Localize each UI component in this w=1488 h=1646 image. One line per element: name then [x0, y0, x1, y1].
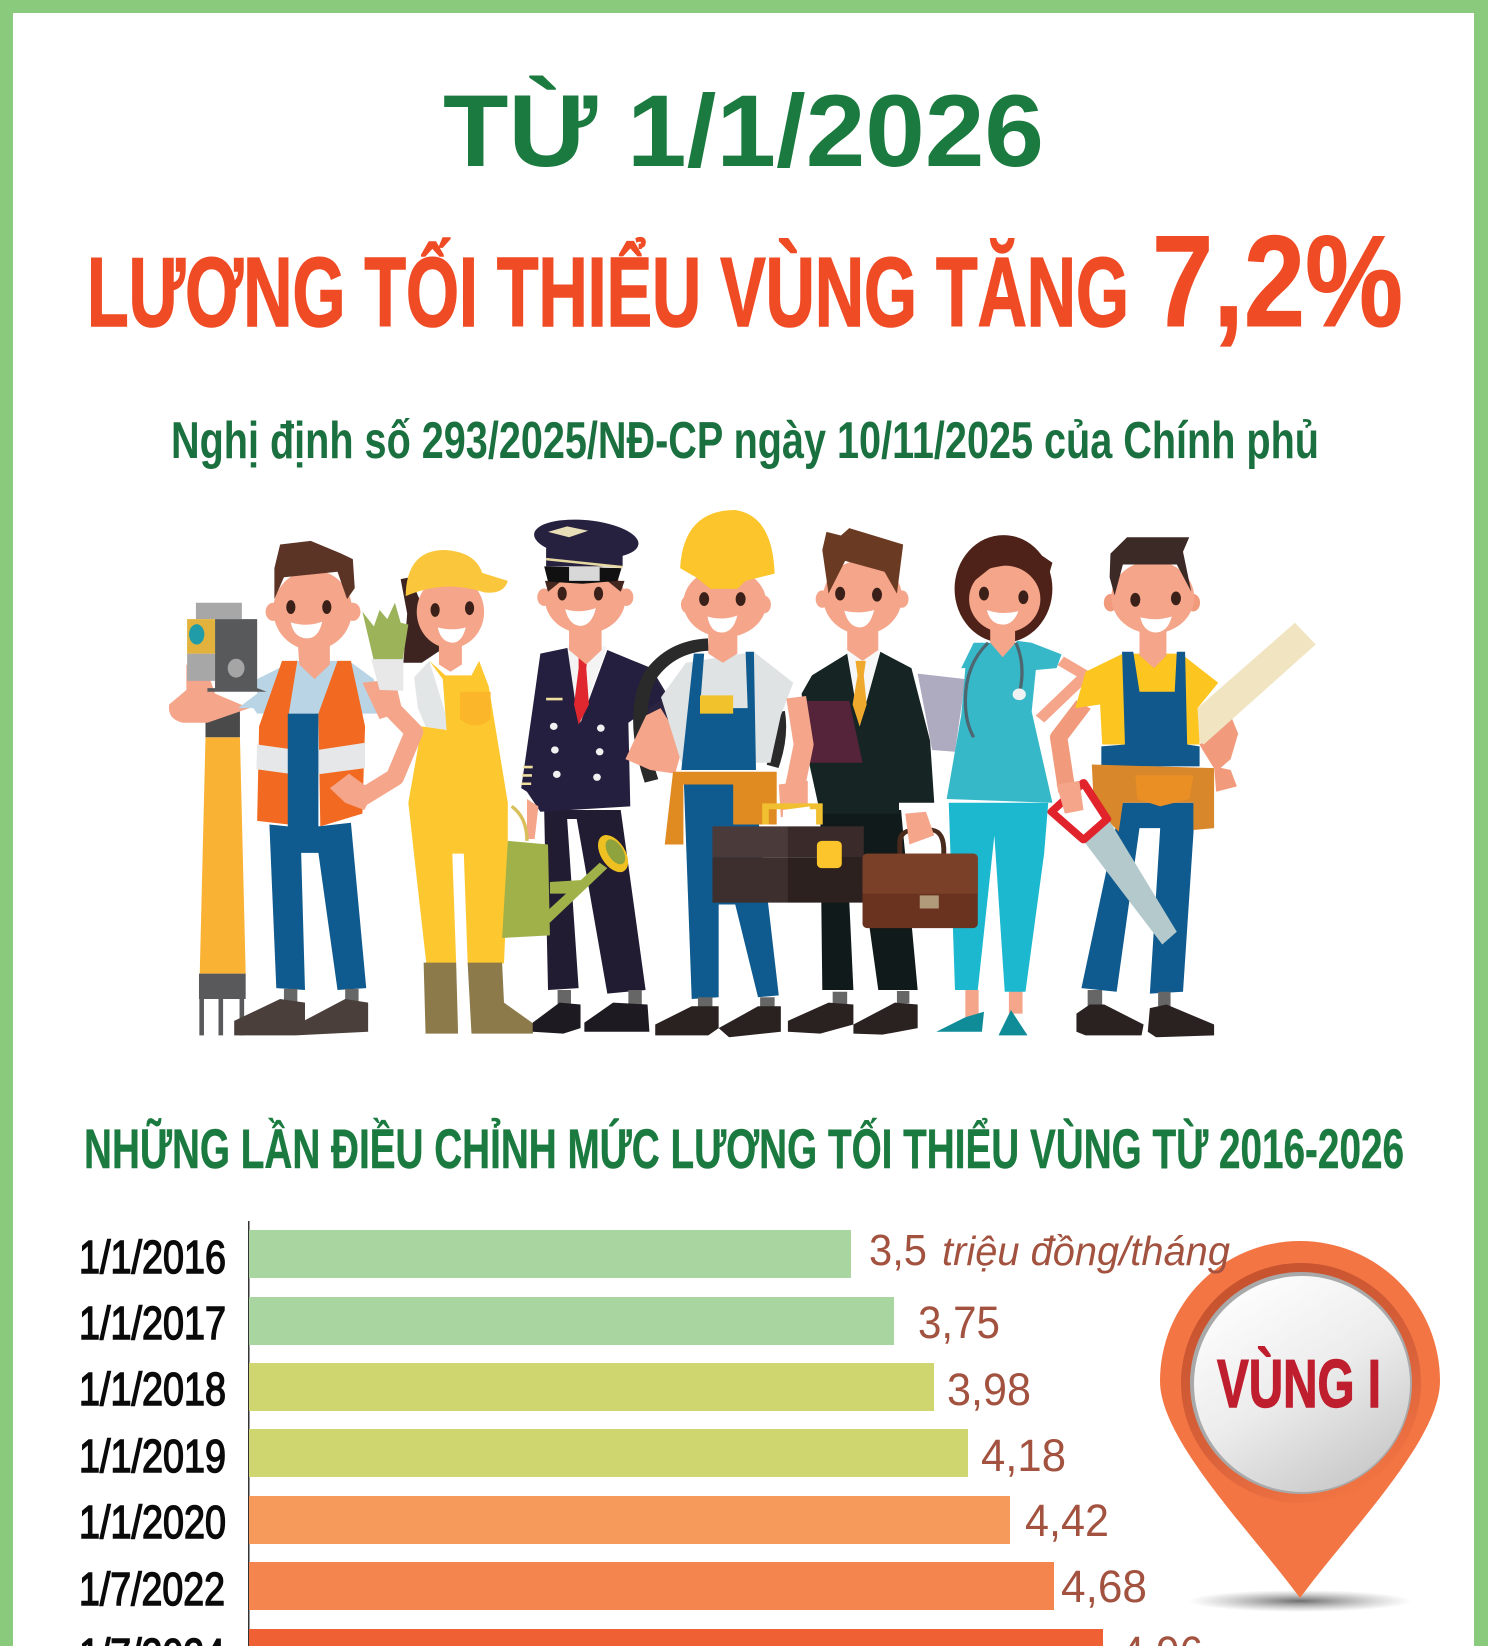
bar 2016: 1/1/2016: [79, 1231, 226, 1283]
location pin: Vùng I: VÙNG I: [1217, 1346, 1381, 1422]
bar chart: minimum wage adjustments: [79, 1221, 1230, 1646]
watering can: [502, 806, 634, 938]
plant pot: [362, 603, 408, 691]
bar 2016: triệu đồng/tháng: [942, 1228, 1230, 1274]
bar 2017: 1/1/2017: [79, 1297, 226, 1349]
title line 2: 7,2%: [1152, 208, 1403, 354]
lawyer figure: [788, 528, 934, 1035]
workers: builder, lawyer, nurse, carpenter: [625, 510, 1316, 1037]
nurse figure: [918, 535, 1086, 1035]
toolbox: [712, 806, 864, 903]
bar 2024: [79, 1627, 1203, 1646]
bar 2020: [79, 1495, 1109, 1548]
bar 2018: 3,98: [947, 1364, 1031, 1415]
briefcase: [863, 812, 978, 928]
bar 2020: 4,42: [1025, 1495, 1109, 1546]
title line 1: TỪ 1/1/2026: [443, 74, 1044, 188]
bar 2019: [79, 1429, 1066, 1482]
pilot figure: [521, 515, 682, 1034]
bar 2019: 4,18: [981, 1430, 1066, 1481]
bar 2018: [79, 1363, 1031, 1415]
bar 2020: 1/1/2020: [79, 1496, 226, 1548]
bar 2017: [79, 1297, 1000, 1349]
bar 2016: [79, 1226, 1230, 1283]
bar 2022: 1/7/2022: [79, 1563, 225, 1615]
builder figure: [625, 510, 808, 1037]
bar 2022: [79, 1561, 1147, 1615]
bar 2022: 4,68: [1061, 1561, 1147, 1612]
location pin: Vùng I: [1160, 1241, 1440, 1612]
bar 2016: 3,5: [869, 1226, 927, 1275]
gardener figure: [401, 550, 535, 1034]
carpenter figure: [1052, 537, 1316, 1037]
illustration: workers group: [169, 510, 1316, 1037]
surveyor figure: [169, 541, 414, 1035]
workers: surveyor, gardener, pilot: [169, 515, 682, 1035]
bar 2019: 1/1/2019: [79, 1430, 226, 1482]
bar 2018: 1/1/2018: [79, 1363, 226, 1415]
bar 2017: 3,75: [918, 1297, 1000, 1348]
